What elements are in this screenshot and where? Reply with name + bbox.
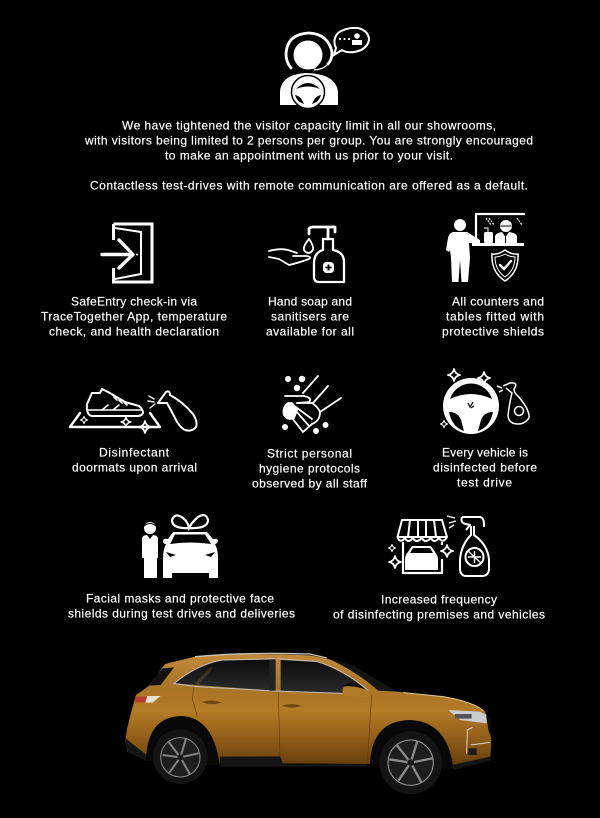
lower trim xyxy=(125,738,490,770)
icon: steering wheel with spray xyxy=(440,369,529,434)
caption: safeentry xyxy=(41,294,227,338)
icon: gift bow xyxy=(172,515,208,528)
caption: vehicle disinfected: disinfected before xyxy=(433,460,537,474)
icon: shoe on doormat with spray xyxy=(70,389,197,433)
rear wheel xyxy=(146,716,220,784)
caption: hygiene xyxy=(252,446,368,490)
caption: hand soap xyxy=(266,294,354,338)
caption: vehicle disinfected: test drive xyxy=(457,476,512,490)
icon: person at shielded counter xyxy=(446,214,525,282)
caption: hygiene: Strict personal xyxy=(267,446,352,460)
intro text block: We have tightened the visitor capacity limit in all our showrooms, xyxy=(122,118,496,132)
caption: counters: All counters and xyxy=(452,294,544,308)
hood highlight xyxy=(403,693,483,711)
caption: counters xyxy=(442,294,544,338)
caption: increased frequency: Increased frequency xyxy=(381,592,497,606)
intro text block xyxy=(84,118,533,192)
caption: hand soap: Hand soap and xyxy=(268,294,352,308)
car body xyxy=(125,654,491,768)
caption: hand soap: available for all xyxy=(266,324,354,338)
intro text block: to make an appointment with us prior to your visit. xyxy=(165,148,453,162)
front wheel xyxy=(370,720,453,794)
caption: masks: Facial masks and protective face xyxy=(86,592,274,606)
mirror xyxy=(342,682,369,698)
caption: doormats xyxy=(72,446,197,474)
caption: increased frequency: of disinfecting premises and vehicles xyxy=(333,608,545,622)
caption: safeentry: SafeEntry check-in via xyxy=(71,294,197,308)
icon: washing hands with bubbles xyxy=(282,376,341,434)
caption: doormats: Disinfectant xyxy=(99,446,170,460)
car illustration: bronze SUV xyxy=(125,653,491,794)
icon: shop with car and spray bottle xyxy=(388,516,489,576)
caption: counters: tables fitted with xyxy=(446,310,544,324)
caption: counters: protective shields xyxy=(442,324,544,338)
caption: masks xyxy=(68,592,295,620)
icon: shield with check xyxy=(492,250,518,281)
caption: hygiene: hygiene protocols xyxy=(259,462,360,476)
caption: vehicle disinfected xyxy=(433,446,537,490)
door handles and seams xyxy=(193,687,372,765)
roof highlight xyxy=(195,653,327,658)
caption: vehicle disinfected: Every vehicle is xyxy=(442,446,528,460)
intro text block: with visitors being limited to 2 persons per group. You are strongly encouraged xyxy=(84,134,533,148)
caption: hand soap: sanitisers are xyxy=(271,310,349,324)
icon: speech bubble xyxy=(334,28,369,55)
caption: increased frequency xyxy=(333,592,545,622)
caption: safeentry: TraceTogether App, temperature xyxy=(41,310,227,324)
tail light and head light xyxy=(135,696,491,755)
side windows xyxy=(173,659,368,693)
icon: door with entry arrow xyxy=(102,224,152,282)
caption: hygiene: observed by all staff xyxy=(252,476,368,490)
caption: doormats: doormats upon arrival xyxy=(72,460,197,474)
icon: headset agent with steering wheel xyxy=(280,28,369,108)
intro text block: Contactless test-drives with remote communication are offered as a default. xyxy=(90,178,528,192)
icon: masked staff with car and bow xyxy=(142,515,218,578)
caption: safeentry: check, and health declaration xyxy=(49,324,219,338)
caption: masks: shields during test drives and deliveries xyxy=(68,606,295,620)
rear and front screens xyxy=(147,667,174,686)
icon: hand and soap pump xyxy=(269,227,344,282)
